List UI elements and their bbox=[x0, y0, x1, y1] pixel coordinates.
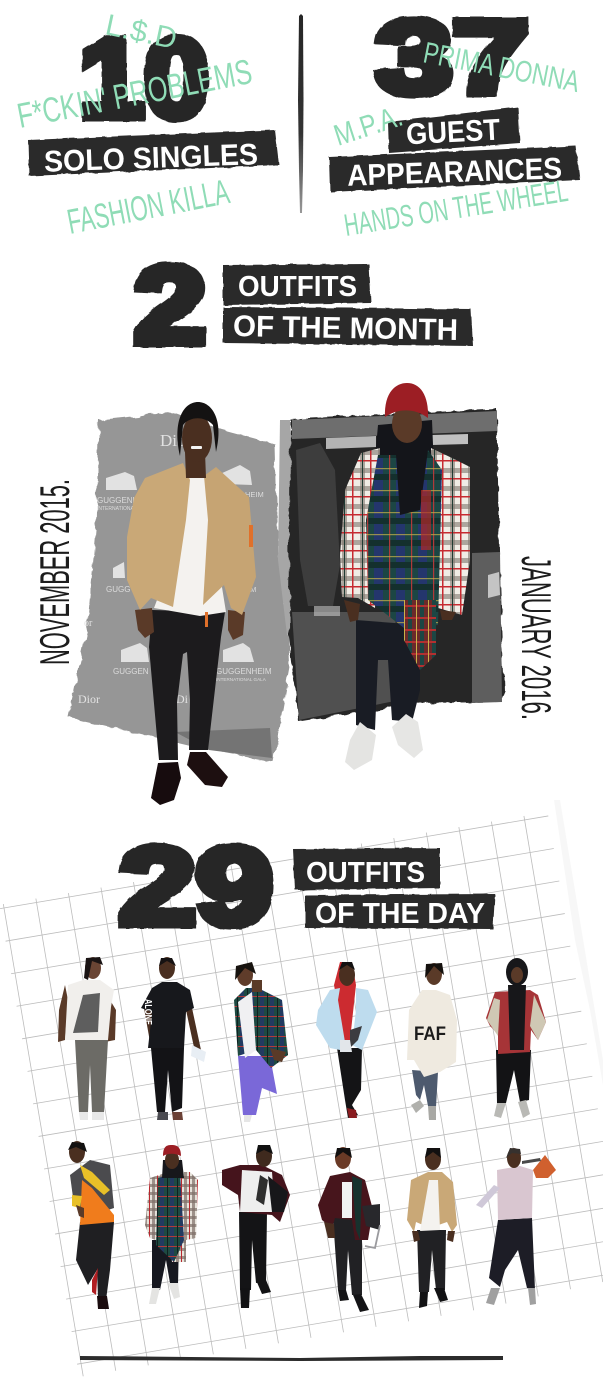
zip tag bbox=[205, 612, 208, 627]
outfit 2 bbox=[141, 957, 206, 1120]
divider bbox=[298, 14, 304, 213]
banner: guest bbox=[388, 107, 520, 153]
backdrop logos: GUGGENHEIM bbox=[97, 496, 153, 505]
outfit 9 bbox=[222, 1145, 290, 1308]
backdrop logos: or bbox=[84, 618, 93, 629]
banner: of the day bbox=[305, 894, 495, 930]
beanie bbox=[385, 383, 428, 418]
photo: right dark party scene bbox=[289, 409, 504, 722]
outfit 2: ALONE bbox=[142, 999, 153, 1025]
person: November 2015 look bbox=[127, 402, 256, 805]
trousers bbox=[356, 620, 420, 730]
number: 37 guest appearances: 37 bbox=[376, 0, 529, 116]
teeth bbox=[191, 446, 202, 449]
bottom rule bbox=[80, 1356, 503, 1361]
backdrop logos: GUGGEN bbox=[113, 667, 149, 676]
handwritten: F*ckin' Problems: F*CKIN' PROBLEMS bbox=[14, 52, 255, 136]
jacket right panel bbox=[203, 467, 256, 615]
hands bbox=[135, 608, 154, 638]
banner: outfits bbox=[223, 264, 371, 305]
number: 29 outfits of the day: 29 bbox=[119, 825, 273, 948]
label: of the month: OF THE MONTH bbox=[233, 310, 458, 347]
backdrop logos bbox=[78, 431, 272, 706]
jacket left panel bbox=[127, 463, 190, 610]
label: appearances: APPEARANCES bbox=[347, 152, 563, 193]
backdrop logos: Dior bbox=[78, 692, 100, 706]
background figure bbox=[296, 443, 340, 606]
backdrop logos: INTERNATIONAL GALA bbox=[216, 677, 267, 682]
label: outfits: OUTFITS bbox=[238, 271, 357, 303]
scarf tail bbox=[404, 600, 436, 670]
neck bbox=[185, 452, 206, 478]
outfit 4 bbox=[316, 962, 377, 1118]
photo: gray strip between pieces bbox=[278, 420, 304, 635]
number: 10 solo singles: 10 bbox=[79, 16, 209, 141]
outfit 5: FAF bbox=[414, 1024, 446, 1045]
number: 2 outfits of the month: 2 bbox=[134, 244, 206, 367]
t-shirt bbox=[154, 476, 226, 616]
red patch bbox=[421, 490, 431, 550]
outfit 8 bbox=[145, 1145, 198, 1304]
handwritten: Fashion Killa: FASHION KILLA bbox=[64, 172, 233, 242]
label: of the day: OF THE DAY bbox=[315, 898, 485, 930]
outfit 5 bbox=[407, 963, 457, 1120]
sneakers in background bbox=[314, 606, 340, 616]
backdrop logos: GUGG bbox=[106, 585, 130, 594]
hood bbox=[374, 420, 434, 515]
handwritten: L.$.D: L.$.D bbox=[103, 9, 180, 56]
sleeve patch bbox=[249, 525, 253, 547]
frieze bbox=[292, 411, 497, 439]
outfit 12 bbox=[476, 1148, 556, 1305]
banner: appearances bbox=[329, 146, 580, 193]
shoes bbox=[345, 722, 376, 770]
trousers bbox=[149, 610, 225, 760]
label: guest: GUEST bbox=[405, 114, 501, 151]
scarf and shirt bbox=[366, 450, 442, 628]
date: November 2015: NOVEMBER 2015. bbox=[31, 479, 78, 665]
outfit 6 bbox=[486, 958, 546, 1118]
wall bbox=[326, 436, 376, 449]
banner: of the month bbox=[223, 307, 473, 347]
outfit 1 bbox=[58, 957, 116, 1120]
paper edge shading bbox=[554, 800, 603, 1085]
backdrop logos: INTERNATIONAL bbox=[97, 506, 137, 512]
backdrop logos: Dior bbox=[160, 431, 192, 450]
coat right bbox=[431, 448, 470, 615]
table bbox=[472, 552, 502, 703]
backdrop logos: GUGGENHEIM bbox=[216, 667, 272, 676]
label: solo singles: SOLO SINGLES bbox=[44, 138, 259, 179]
outfit 10 bbox=[318, 1147, 380, 1312]
outfit 7 bbox=[68, 1141, 114, 1309]
banner: outfits bbox=[293, 848, 440, 890]
grid paper bbox=[0, 812, 603, 1377]
outfit 11 bbox=[407, 1148, 457, 1308]
banner: solo singles bbox=[28, 130, 279, 179]
face bbox=[392, 405, 422, 443]
person: January 2016 look bbox=[340, 383, 470, 770]
date: January 2016: JANUARY 2016. bbox=[513, 556, 560, 720]
photo: left gray backdrop bbox=[68, 412, 290, 762]
head bbox=[182, 414, 212, 462]
torn white paper corner bbox=[215, 1282, 603, 1380]
handwritten: M.P.A.: M.P.A. bbox=[330, 100, 407, 153]
shoes bbox=[151, 762, 181, 805]
outfit 3 bbox=[234, 962, 288, 1122]
coat left bbox=[340, 448, 380, 608]
backdrop logos: Di bbox=[176, 692, 189, 706]
label: outfits: OUTFITS bbox=[306, 857, 425, 889]
backdrop logos: HEIM bbox=[245, 490, 264, 499]
hands bbox=[344, 600, 360, 622]
backdrop logos: IM bbox=[248, 585, 256, 594]
ground bbox=[292, 612, 400, 720]
hair bbox=[177, 402, 219, 456]
